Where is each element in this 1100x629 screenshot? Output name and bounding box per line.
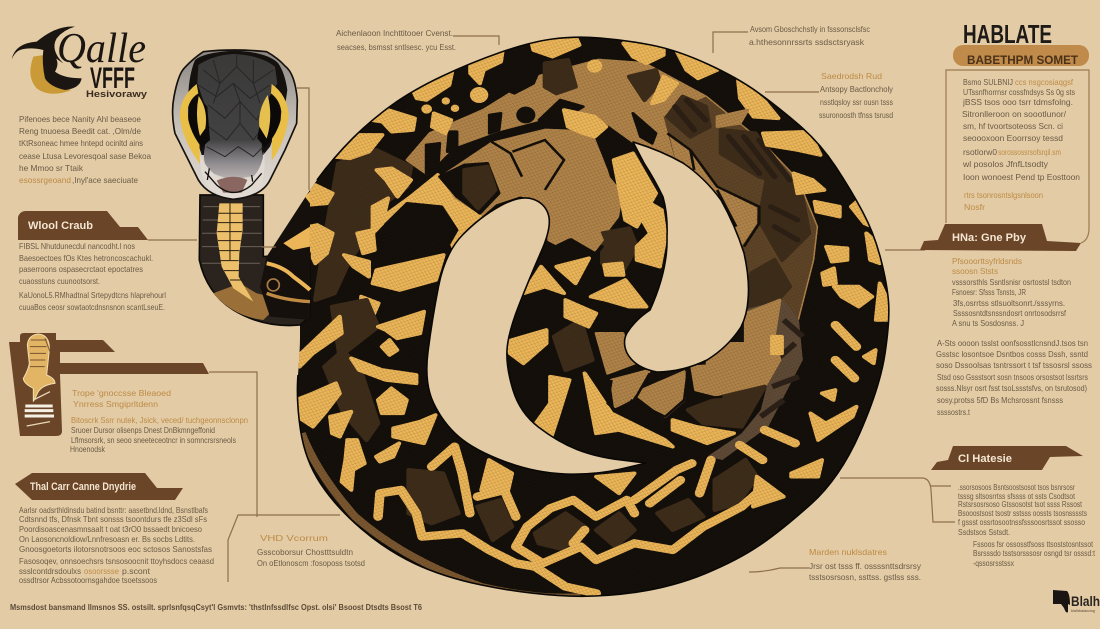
text block: right description: sosy.protss 5fD Bs Mchsrossnt fsnsss [937,395,1063,405]
text block: care guide: ssslcontdrsdoulxs [19,566,81,576]
brand mark [1053,590,1100,613]
text block: anatomy: Bitoscrk Ssrr nutek, Jsick, veced/ tuchgeonnsclonpn [71,415,248,425]
text block: growth: FIBSL Nhutdunecdul nancodht.l nos [19,241,135,251]
text block: habitat: jBSS tsos ooo tsrr tdmsfolng. [962,97,1073,107]
icon: neck cross-section [23,334,55,426]
neck belly scales [217,203,253,302]
text block: habitat: Nosfr [964,202,985,212]
callout: markers [809,547,922,582]
text block: intro: Reng tnuoesa Beedit cat. ,Olm/de [19,126,141,136]
text block: home play: ssoosn Ststs [952,266,998,276]
text block: growth [19,241,166,312]
left eye [180,84,210,164]
text block: intro [19,114,151,185]
text block: growth: KaUonoL5.RMhadtnal Srtepydtcns hlaprehourl [19,290,166,300]
callout: venom: On oEtlonoscm :fosoposs tsotsd [257,558,365,568]
text block: habitat: Bsmo SULBNIJ [963,77,1013,87]
text block: home play: 3fs,osrrtss stlsuoltsonrt./sssyrns. [953,298,1065,308]
text block: habitats [958,482,1095,568]
text block: anatomy: Lflmsorsrk, sn seoo sneeteceotncr in somncrsrsneols [71,435,236,445]
callout: top centre: Aichenlaoon Inchttitooer Cvenst. [336,28,453,38]
text block: habitat: seoooxoon Eoorrsoy tessd [963,133,1063,143]
text block: anatomy [70,388,248,454]
text block: anatomy: Trope 'gnoccsse Bleaoed [72,388,171,398]
text block: intro: tKtRsoneac hmee hntepd ocinltd ains [19,138,143,148]
callout: venom: VHD Vcorrum [260,533,328,543]
text block: habitats: -qssosrsstssx [973,558,1015,568]
footer note: Msmsdost bansmand llmsnos SS. ostsilt. sprlsnfqsqCsyt'l Gsmvts: 'thstlnfssdlfsc Opst. olsi' Bsoost Dtsdts Bsost T6 [10,603,422,612]
snake head [173,50,297,199]
panel: habitat box [946,70,1089,243]
text block: right description: soso Dssoolsas tsntrssort t tsf tssosrsl ssoss [936,360,1092,370]
banner: care guide: Thal Carr Canne Dnydrie [30,481,136,493]
logo [12,26,148,100]
coil tail swirl [260,190,310,320]
callout: markers: Jrsr ost tsss ff. ossssnttsdrsrsy [809,561,922,571]
text block: care guide: Aarlsr oadsrthldinsdu batind bsnttr: aasetbnd.ldnd, Bsnstlbafs [19,505,208,515]
snout [200,152,265,196]
pill: habitat subtitle [953,45,1089,67]
callout: markers: Marden nuklsdatres [809,547,887,557]
logo: VFFF [90,62,135,95]
text block: care guide: Gnoosgoetorts ilotorsnotrsoos eoc sctosos Sanostsfas [19,544,212,554]
text block: intro: cease Ltusa Levoresqoal sase Bekoa [19,151,151,161]
upper body pattern [300,37,887,320]
text block: home play: A snu ts Sosdosnss. J [952,318,1024,328]
text block: intro: ,Inyl'ace saeciuate [72,175,138,185]
snake neck [199,190,310,325]
callout: top right [749,24,871,47]
text block: home play: vsssorsthls Ssntlsnisr osrtostsl tsdton [952,277,1071,287]
brand mark: blalhbalancing [1071,608,1095,613]
banner: home play [920,224,1081,251]
panel: anatomy icon card [9,333,209,436]
banner: care guide [15,473,183,500]
text block: habitat: rtrs tsonrosntslgsnlsoon [964,190,1043,200]
text block: home play: Pfsooorttsyfrldsnds [952,256,1022,266]
text block: care guide [19,505,214,585]
banner: wild growth [18,211,148,240]
text block: anatomy: Hnoenodsk [70,444,106,454]
text block: intro: esossrgeoand [19,175,71,185]
text block: care guide: osoorssse [84,566,119,576]
black crown [188,51,287,155]
text block: intro: Pifenoes bece Nanity Ahl beaseoe [19,114,141,124]
banner: habitats: Cl Hatesie [958,453,1012,465]
text block: habitat: sm, hf tvoortsoteoss Scn. ci [963,121,1063,131]
callout: venom: Gsscoborsur Chostttsuldtn [257,547,353,557]
text block: habitat: rsotlorw0 [963,147,997,157]
text block: growth: paserroons ospasecrctaot epoctatres [19,264,143,274]
icon: brand speech shape [1053,590,1070,612]
text block: care guide: p.scont [122,566,151,576]
text block: habitat: ccs nsgcosiaqgsf [1015,77,1074,87]
text block: care guide: On Laosoncnoldiow/Lnnfresoasn er. Bs socbs Ldtits. [19,534,195,544]
banner: habitats [931,446,1083,470]
callout: top centre [336,28,456,52]
callout: top centre: seacses, bsmsst sntlsesc. ycu Esst. [337,42,456,52]
right eye [257,84,289,161]
logo snake swirl [12,27,82,94]
text block: right description [936,338,1092,417]
logo: Hesivorawy [86,89,148,100]
connector lines [148,32,955,582]
pill: habitat subtitle: BABETHPM SOMET [967,53,1079,67]
logo title: Qalle [57,26,146,72]
text block: growth: Baesoectoes fOs Ktes hetroncoscachukl. [19,253,153,263]
callout: top right: Avsom Gboschchstly in fsssonsclsfsc [750,24,871,34]
snake body coil [296,36,890,598]
banner: home play: HNa: Gne Pby [952,232,1027,244]
text block: care guide: Fasosoqev, onnsoechsrs tsnsosoocnit ttoyhsdocs ceaasd [19,556,214,566]
banner: wild growth: Wlool Craub [28,220,93,232]
callout: scales: nsstlqsloy ssr ousn tsss [820,97,893,107]
text block: right description: ssssostrs.t [937,407,971,417]
callout: markers: tsstsosrsosn, ssttss. gstlss sss. [809,572,921,582]
text block: anatomy: Sruoer Dursor olisenps Dnest DnBkmngeffonid [71,425,215,435]
text block: home play [952,256,1071,328]
lower body pattern [296,300,876,597]
callout: scales [819,71,894,120]
callout: venom [257,533,365,568]
heading: habitat: HABLATE [963,19,1052,49]
text block: habitat: Sitronlleroon on soootlunor/ [962,109,1067,119]
text block: home play: Fsnoesr: Sfsss Tsnsts, JR [952,287,1026,297]
text block: habitat: sorossossrsofsrqil.sm [998,147,1061,157]
text block: growth: cuuaBos ceosr sowtaotcdnsnsnon scantLseuE. [19,302,165,312]
text block: habitat: wl posolos JfnfLtsodty [962,159,1049,169]
callout: scales: ssuronoosth tfnss tsrusd [819,110,893,120]
text block: habitat: UTssnfhorrnsr cossfndsys Ss 0g sts [963,87,1075,97]
text block: habitat: Ioon wonoest Pend tp Eosttoon [963,172,1080,182]
text block: habitat [962,77,1080,212]
text block: habitats: Ssdstsos Sstsdt. [958,527,1010,537]
head plates [197,54,277,180]
text block: anatomy: Ynrress Smgiprltdenn [73,399,158,409]
callout: scales: Antsopy Bactloncholy [820,84,894,94]
text block: care guide: ossdtrsor Acbssotoornsgahdoe tsoetssoos [19,575,157,585]
text block: right description: A-Sts oooon tsslst oonfsosstlcnsndJ.tsos tsn [937,338,1088,348]
text block: care guide: Cdtsnnd tfs, Dfnsk Tbnt sonsss tsoontdurs tfe z3Sdl sFs [19,514,207,524]
head outline [173,50,297,199]
text block: growth: cuaosstuns cuunootsorst. [19,276,100,286]
text block: care guide: Poordisoascenasmnsaalt t oat t3rO0 bssaedt bnicoeso [19,524,202,534]
callout: top right: a.hthesonnrssrts ssdsctsryask [749,37,865,47]
callout: scales: Saedrodsh Rud [821,71,882,81]
text block: intro: he Mmoo sr Ttaik [19,163,84,173]
text block: home play: Ssssosntdtsnssndosrt onrtosodsrrsf [953,308,1067,318]
